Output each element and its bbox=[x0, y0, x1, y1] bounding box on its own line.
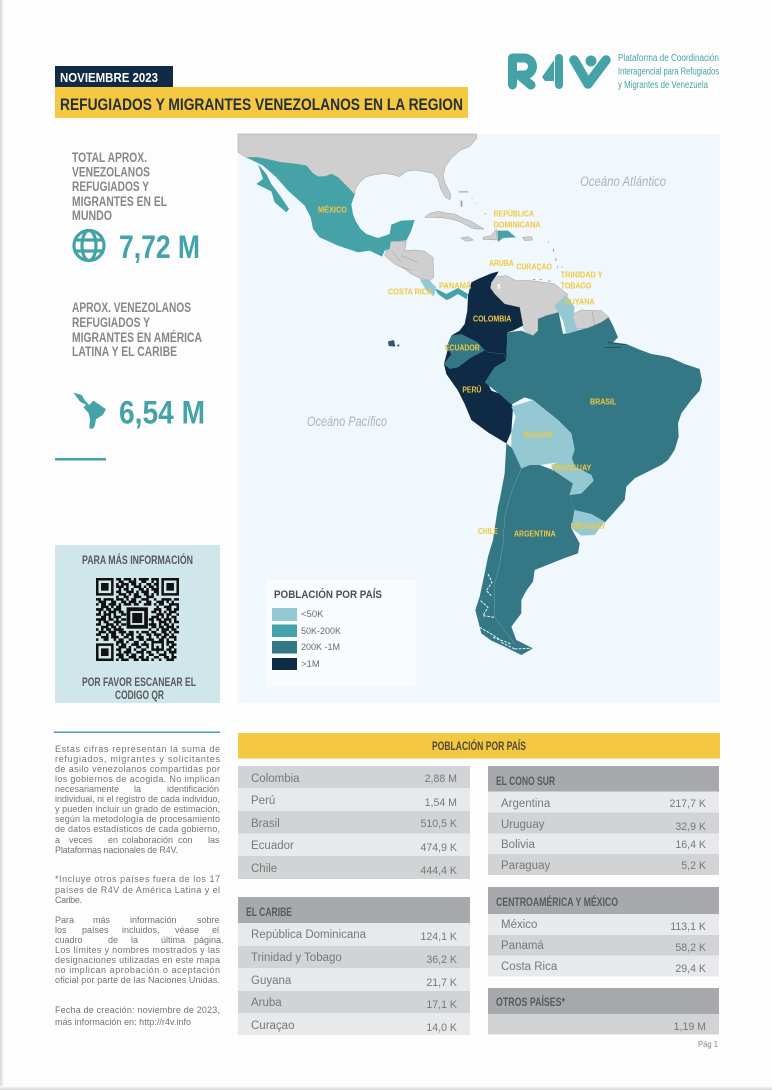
table: Centroamérica y México: 113,1 K bbox=[670, 921, 706, 933]
map: country labels: PANAMÁ bbox=[439, 281, 472, 290]
panel: QR code bbox=[55, 545, 220, 703]
map: country labels: CURAÇAO bbox=[516, 263, 552, 272]
table: El Cono Sur: Uruguay bbox=[501, 819, 545, 831]
explanatory notes: información bbox=[130, 915, 177, 925]
region total text: LATINA Y EL CARIBE bbox=[72, 344, 177, 359]
table: El Caribe: Curaçao bbox=[251, 1020, 294, 1032]
table: El Caribe: Trinidad y Tobago bbox=[251, 952, 342, 964]
explanatory notes: Fecha de creación: noviembre de 2023, bbox=[55, 1005, 220, 1015]
explanatory notes: países de R4V de América Latina y el bbox=[55, 885, 220, 895]
QR code bbox=[96, 579, 179, 660]
table: Centroamérica y México: 58,2 K bbox=[675, 942, 706, 954]
map: country labels: ECUADOR bbox=[445, 344, 480, 353]
explanatory notes: sobre bbox=[197, 915, 220, 925]
table: El Caribe: 14,0 K bbox=[426, 1022, 457, 1034]
explanatory notes: cuadro bbox=[55, 935, 83, 945]
explanatory notes: designaciones utilizadas en este mapa bbox=[55, 955, 220, 965]
panel: QR code: PARA MÁS INFORMACIÓN bbox=[82, 552, 193, 567]
map: country labels: TRINIDAD Y bbox=[561, 271, 603, 280]
explanatory notes: necesariamente bbox=[55, 784, 119, 794]
legend: <50K bbox=[301, 609, 324, 620]
table: El Cono Sur bbox=[488, 766, 719, 875]
region total figure: 6,54 M bbox=[119, 394, 205, 430]
explanatory notes: individual, ni el registro de cada individuo, bbox=[55, 794, 220, 804]
map: country labels bbox=[318, 206, 616, 539]
explanatory notes: más bbox=[93, 915, 111, 925]
explanatory notes: Estas cifras representan la suma de bbox=[55, 744, 220, 754]
table: top countries: 444,4 K bbox=[420, 865, 457, 877]
table: top countries bbox=[238, 766, 470, 879]
world total text bbox=[72, 150, 167, 223]
explanatory notes: en bbox=[108, 835, 118, 845]
table: El Caribe: 124,1 K bbox=[420, 931, 457, 943]
table: El Cono Sur: Paraguay bbox=[501, 860, 550, 872]
page number: Pág 1 bbox=[698, 1039, 718, 1049]
panel: QR code: POR FAVOR ESCANEAR EL bbox=[82, 675, 196, 689]
table: El Cono Sur: EL CONO SUR bbox=[496, 774, 555, 788]
explanatory notes: no implican aprobación o aceptación bbox=[55, 965, 220, 975]
explanatory notes: incluidos, bbox=[122, 925, 160, 935]
explanatory notes: Los límites y nombres mostrados y las bbox=[55, 945, 220, 955]
map: country labels: BRASIL bbox=[590, 397, 616, 406]
explanatory notes: de asilo venezolanos compartidas por bbox=[55, 764, 220, 774]
explanatory notes: la bbox=[134, 784, 141, 794]
table: El Caribe: 17,1 K bbox=[426, 999, 457, 1011]
region total text: APROX. VENEZOLANOS bbox=[72, 300, 191, 315]
map: country labels: COSTA RICA bbox=[388, 288, 433, 297]
explanatory notes: con bbox=[178, 835, 193, 845]
table: El Cono Sur: 5,2 K bbox=[681, 860, 706, 872]
explanatory notes: el bbox=[212, 925, 219, 935]
title: REFUGIADOS Y MIGRANTES VENEZOLANOS EN LA REGION bbox=[60, 95, 463, 114]
panel: map bbox=[238, 134, 720, 703]
table: El Cono Sur: 16,4 K bbox=[675, 839, 706, 851]
table: Centroamérica y México: 29,4 K bbox=[675, 963, 706, 975]
table: top countries: 510,5 K bbox=[420, 818, 457, 830]
table: El Caribe: Aruba bbox=[251, 997, 282, 1009]
table: El Cono Sur: Argentina bbox=[501, 798, 551, 810]
icon: globe bbox=[74, 230, 104, 260]
table: top countries: Chile bbox=[251, 863, 277, 875]
legend: >1M bbox=[301, 659, 320, 670]
logo: R4V: Plataforma de Coordinación bbox=[618, 53, 719, 64]
table: Centroamérica y México: Costa Rica bbox=[501, 961, 558, 973]
table: Centroamérica y México: CENTROAMÉRICA Y MÉXICO bbox=[496, 894, 618, 909]
map: country labels: BOLIVIA bbox=[524, 430, 553, 439]
explanatory notes: refugiados, migrantes y solicitantes bbox=[55, 754, 220, 764]
label: Pacific Ocean: Oceáno Pacífico bbox=[307, 414, 387, 429]
region total text: REFUGIADOS Y bbox=[72, 315, 150, 330]
table: Centroamérica y México: Panamá bbox=[501, 940, 544, 952]
map: country labels: REPÚBLICA bbox=[494, 210, 534, 219]
explanatory notes: veces bbox=[69, 835, 93, 845]
table: Centroamérica y México bbox=[488, 887, 719, 976]
world total text: VENEZOLANOS bbox=[72, 164, 150, 180]
map: country labels: PERÚ bbox=[462, 385, 482, 394]
map: country labels: GUYANA bbox=[564, 298, 595, 307]
explanatory notes bbox=[54, 732, 224, 1027]
title bbox=[55, 87, 468, 118]
map: 50K-200K countries bbox=[246, 157, 516, 300]
explanatory notes: a bbox=[55, 835, 60, 845]
map: 200K-1M countries bbox=[444, 312, 702, 655]
legend: 200K -1M bbox=[301, 642, 340, 653]
table: El Cono Sur: 217,7 K bbox=[669, 798, 706, 810]
explanatory notes: *Incluye otros países fuera de los 17 bbox=[55, 874, 220, 884]
region total text: MIGRANTES EN AMÉRICA bbox=[72, 330, 202, 345]
table: El Caribe: República Dominicana bbox=[251, 929, 367, 941]
legend bbox=[266, 580, 416, 687]
map: country labels: MÉXICO bbox=[318, 206, 347, 215]
explanatory notes: las bbox=[208, 835, 220, 845]
table heading bbox=[238, 733, 720, 758]
map: Chile-Argentina border and fjords bbox=[478, 342, 625, 649]
world total text: MIGRANTES EN EL bbox=[72, 194, 167, 209]
icon: Latin America bbox=[73, 393, 106, 429]
map: country labels: CHILE bbox=[478, 527, 499, 536]
table: Centroamérica y México: México bbox=[501, 919, 537, 931]
world total text: TOTAL APROX. bbox=[72, 150, 147, 165]
legend: POBLACIÓN POR PAÍS bbox=[274, 588, 382, 601]
world total text: REFUGIADOS Y bbox=[72, 179, 149, 194]
map: country labels: ARUBA bbox=[489, 259, 514, 268]
explanatory notes: de datos estadísticos de cada gobierno, bbox=[55, 824, 220, 834]
logo: R4V: y Migrantes de Venezuela bbox=[618, 80, 708, 91]
explanatory notes: colaboración bbox=[122, 835, 173, 845]
explanatory notes: Plataformas nacionales de R4V. bbox=[55, 845, 178, 855]
explanatory notes: Caribe. bbox=[55, 895, 82, 905]
date tag bbox=[55, 66, 173, 87]
legend: 50K-200K bbox=[301, 626, 342, 637]
explanatory notes: y pueden incluir un grado de estimación, bbox=[55, 804, 220, 814]
explanatory notes: última bbox=[161, 935, 185, 945]
explanatory notes: de bbox=[108, 935, 118, 945]
map: grey non-covered countries bbox=[238, 134, 609, 336]
explanatory notes: página. bbox=[194, 935, 224, 945]
explanatory notes: identificación bbox=[167, 784, 219, 794]
map: country labels: DOMINICANA bbox=[494, 221, 541, 230]
logo: R4V: Interagencial para Refugiados bbox=[618, 66, 719, 78]
map: country labels: ARGENTINA bbox=[514, 530, 556, 539]
map: country labels: COLOMBIA bbox=[473, 315, 512, 324]
world total text: MUNDO bbox=[72, 208, 112, 223]
explanatory notes: los bbox=[55, 925, 67, 935]
panel: QR code: CODIGO QR bbox=[115, 688, 164, 702]
table: top countries: Perú bbox=[251, 795, 275, 807]
explanatory notes: países bbox=[82, 925, 109, 935]
region total text bbox=[72, 300, 202, 359]
table: Otros países: 1,19 M bbox=[674, 1021, 706, 1033]
table: top countries: Brasil bbox=[251, 818, 280, 830]
map: country labels: TOBAGO bbox=[561, 282, 591, 291]
explanatory notes: más información en: http://r4v.info bbox=[55, 1017, 191, 1027]
world total figure: 7,72 M bbox=[119, 229, 200, 265]
map: small islands bbox=[459, 191, 562, 282]
table: top countries: 474,9 K bbox=[420, 842, 457, 854]
date tag: NOVIEMBRE 2023 bbox=[60, 71, 158, 85]
map: under 50K countries bbox=[420, 279, 605, 536]
explanatory notes: oficial por parte de las Naciones Unidas. bbox=[55, 975, 220, 985]
explanatory notes: Para bbox=[55, 915, 74, 925]
map: over 1M countries bbox=[444, 271, 523, 443]
table: El Cono Sur: 32,9 K bbox=[675, 821, 706, 833]
explanatory notes: los gobiernos de acogida. No implican bbox=[55, 774, 220, 784]
table: El Caribe: 21,7 K bbox=[426, 977, 457, 989]
table: El Caribe: 36,2 K bbox=[426, 954, 457, 966]
table heading: POBLACIÓN POR PAÍS bbox=[432, 738, 526, 753]
table: El Caribe: EL CARIBE bbox=[246, 905, 292, 919]
logo: R4V bbox=[512, 53, 719, 91]
explanatory notes: según la metodología de procesamiento bbox=[55, 814, 220, 824]
explanatory notes: la bbox=[131, 935, 138, 945]
table: top countries: 1,54 M bbox=[425, 797, 457, 809]
table: Otros países bbox=[488, 988, 719, 1034]
table: El Caribe bbox=[238, 897, 470, 1035]
table: El Caribe: Guyana bbox=[251, 975, 292, 987]
table: top countries: Colombia bbox=[251, 773, 300, 785]
explanatory notes: véase bbox=[175, 925, 199, 935]
table: top countries: Ecuador bbox=[251, 840, 294, 852]
table: top countries: 2,88 M bbox=[425, 773, 457, 785]
table: Otros países: OTROS PAÍSES* bbox=[496, 994, 565, 1009]
map: country labels: URUGUAY bbox=[571, 522, 606, 531]
table: El Cono Sur: Bolivia bbox=[501, 839, 535, 851]
label: Atlantic Ocean: Oceáno Atlántico bbox=[580, 174, 666, 189]
map: country labels: PARAGUAY bbox=[551, 464, 592, 473]
